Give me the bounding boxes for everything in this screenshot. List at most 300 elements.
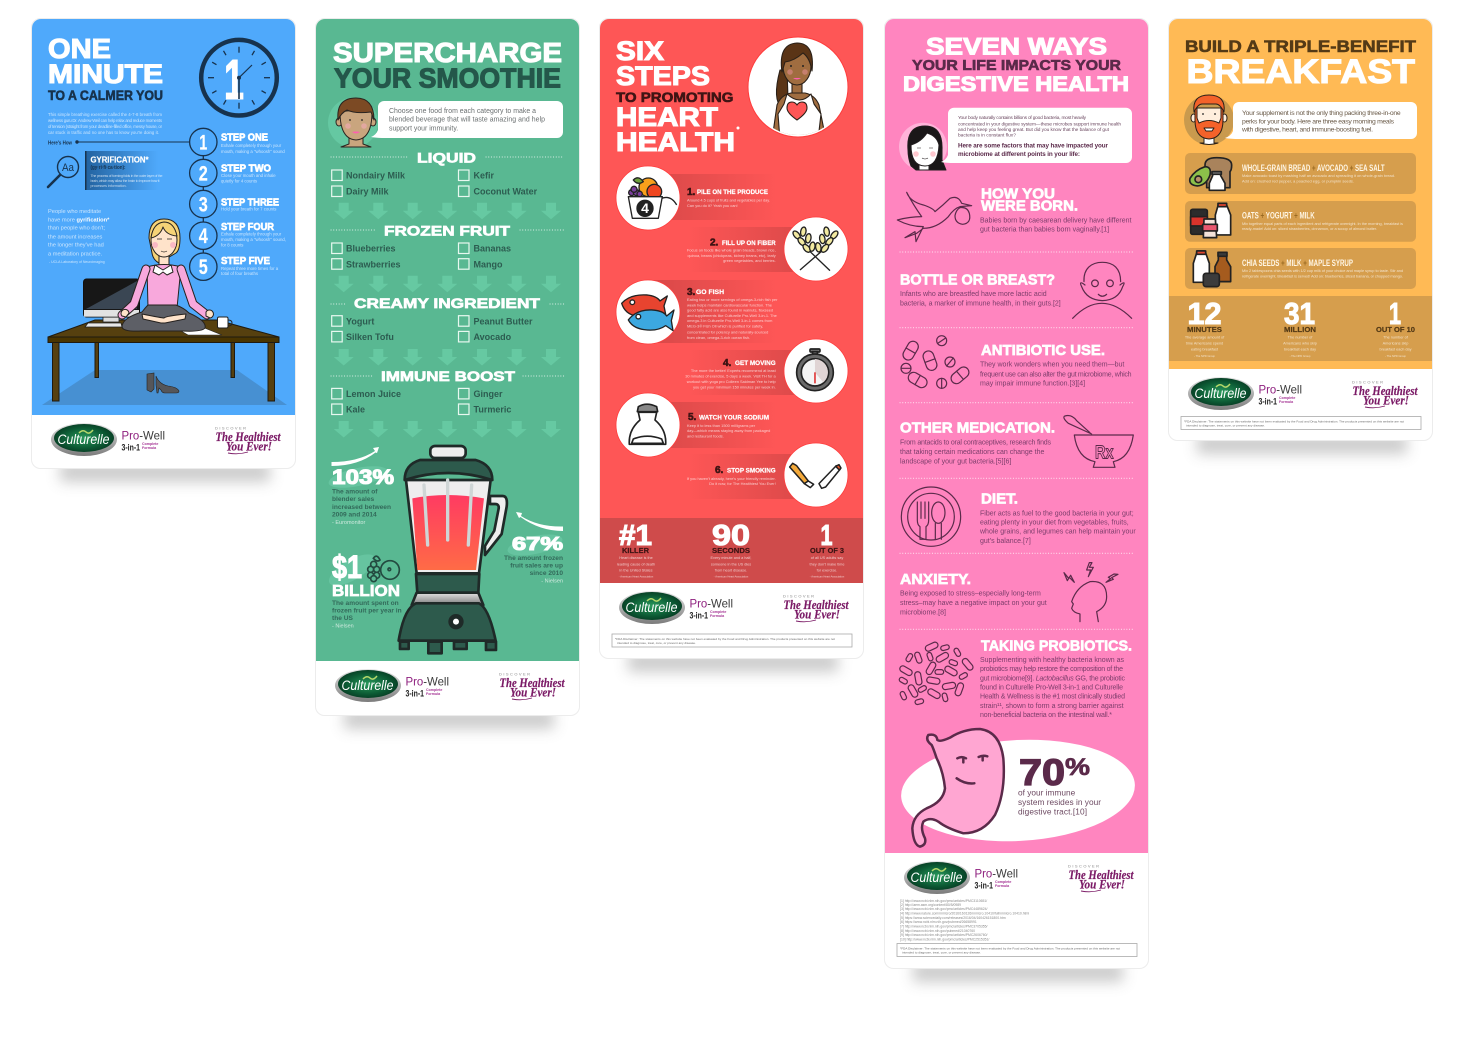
footer: logos: DISCOVER: [1068, 863, 1099, 868]
stat: 31 million: Americans who skip: [1283, 342, 1317, 346]
step 2: fill up on fiber: 2.: [710, 238, 719, 248]
footer: logos: Culturelle: [342, 678, 394, 693]
meditation paragraph: the amount increases: [48, 234, 103, 240]
icon: fruit: [368, 556, 399, 582]
here's how label: Here's How: [48, 140, 73, 146]
gyrification definition box: GYRIFICATION*: [90, 156, 149, 165]
step three: [190, 190, 279, 218]
footer: logos: [335, 669, 565, 702]
stats band: [600, 518, 863, 583]
factor: diet: eating plenty in your diet from vegetables, fruits,: [980, 520, 1129, 527]
title: ONE: [48, 33, 111, 64]
arrows row 3: [334, 349, 561, 366]
stat: 12 minutes: MINUTES: [1187, 325, 1222, 334]
factor: other medication: that taking certain medications can change the: [900, 449, 1044, 456]
step 5: watch your sodium: WATCH YOUR SODIUM: [699, 414, 769, 421]
footer: logos: [904, 861, 1134, 894]
footer: logos: Culturelle: [1194, 386, 1246, 401]
step 2: fill up on fiber: Focus on foods like whole grain breads, brown rice,: [687, 248, 776, 252]
meal: chia seeds, milk, maple syrup: refrigerate overnight. Breakfast is served! Add on: blueberries, sliced banana, or chopped mango.: [1242, 274, 1403, 278]
illustration: blender: [399, 446, 507, 653]
section: frozen fruit: Blueberries: [346, 244, 396, 254]
fda disclaimer: *FDA Disclaimer: The statements on this website have not been evaluated by the Food and Drug Administration. The products presented on this website are not: [900, 946, 1120, 950]
title: DIGESTIVE HEALTH: [903, 73, 1129, 96]
step one: [190, 128, 285, 156]
step 5: watch your sodium: and restaurant foods.: [687, 434, 724, 438]
stat: 103%: increased between: [332, 504, 391, 511]
meal: whole-grain bread, avocado, sea salt: [1185, 153, 1416, 194]
illustration: desk: [48, 320, 279, 401]
stat: 31 million: [1283, 296, 1317, 358]
section: creamy ingredient: Yogurt: [346, 316, 374, 326]
callout: 70% immune system: system resides in your: [1018, 797, 1101, 807]
stat: 31 million: The number of: [1288, 336, 1313, 340]
footer: logos: Formula: [710, 614, 725, 618]
footer: logos: 3-in-1: [690, 610, 708, 620]
arrows row 2: [334, 276, 561, 292]
factor: how you were born: HOW YOU: [981, 186, 1055, 202]
card background: [32, 18, 296, 468]
footer: logos: The Healthiest: [1068, 867, 1134, 882]
step one: STEP ONE: [221, 133, 268, 144]
icon: plate with fork and spoon: [901, 487, 961, 546]
footer: logos: You Ever!: [226, 438, 272, 454]
factor: antibiotic use: may impair immune function.[3][4]: [980, 380, 1085, 387]
step five: total of four breaths: [221, 271, 258, 276]
step 5: watch your sodium: 5.: [688, 412, 697, 423]
references: [5] https://www.sciencedaily.com/releases/2016/04/160426151800.htm: [900, 916, 1006, 920]
stat: #1 killer: leading cause of death: [617, 562, 655, 566]
panel: one minute to a calmer you: [32, 18, 296, 482]
step four: mouth, making a "whoosh" sound,: [221, 237, 286, 242]
gyrification definition box: The process of forming folds in the outer layer of the: [90, 174, 162, 178]
step one: mouth, making a "whoosh" sound: [221, 149, 285, 154]
footer: logos: Culturelle: [910, 870, 962, 885]
footer: logos: Formula: [995, 884, 1010, 888]
meal: whole-grain bread, avocado, sea salt: Make avocado toast by mashing half an avocado and spreading it on whole-grain bread.: [1242, 173, 1395, 178]
stat: 103%: - Euromonitor: [332, 520, 365, 526]
step 6: stop smoking: 6.: [715, 465, 724, 476]
factor: diet: Fiber acts as fuel to the good bacteria in your gut;: [980, 510, 1134, 517]
factor: anxiety: microbiome.[8]: [900, 609, 946, 616]
title: BUILD A TRIPLE-BENEFIT: [1185, 37, 1417, 56]
step three: Hold your breath for 7 counts: [221, 206, 276, 212]
card shadow: [344, 709, 554, 729]
footer: logos: Complete: [1279, 396, 1295, 400]
factor: taking probiotics: non-beneficial bacteria on the intestinal wall.*: [980, 712, 1112, 719]
icon: magnifier: Aa: [62, 162, 75, 174]
footer: logos: DISCOVER: [499, 671, 530, 676]
footer: logos: Pro-Well: [406, 674, 449, 688]
stat: 67%: 67%: [512, 533, 563, 554]
step 4: get moving: workout with yoga pro Colleen Saidman Yee to help: [687, 379, 776, 384]
references: [8] http://www.ncbi.nlm.nih.gov/pubmed/21040760: [900, 929, 975, 933]
stat: 1 out of 3: - American Heart Association: [810, 574, 845, 578]
step four: [190, 222, 286, 249]
illustration: meditating woman: [121, 219, 213, 331]
title: HEALTH: [616, 127, 735, 157]
stat: 90 seconds: someone in the US dies: [711, 562, 751, 566]
title: YOUR SMOOTHIE: [334, 62, 561, 94]
section: frozen fruit: FROZEN FRUIT: [384, 222, 511, 238]
footer: logos: [1188, 377, 1418, 410]
step two: quietly for 4 counts: [221, 179, 257, 184]
avatar: man: [328, 98, 378, 148]
card shadow: [60, 462, 270, 482]
meal: oats, yogurt, milk: OATS + YOGURT + MILK: [1242, 211, 1315, 221]
footer: logos: 3-in-1: [122, 442, 140, 452]
stat: 1 out of 10: [1376, 296, 1415, 358]
step 4: get moving: GET MOVING: [735, 360, 776, 367]
footer: logos: Pro-Well: [974, 866, 1018, 880]
steps: [190, 128, 286, 280]
footer: logos: Complete: [142, 442, 158, 446]
references: [9] http://www.ncbi.nlm.nih.gov/pmc/articles/PMC2606760/: [900, 933, 988, 937]
gyrification definition box: processes information.: [90, 184, 127, 188]
factor: anxiety: stress–may have a negative impact on your gut: [900, 600, 1047, 607]
factor: how you were born: WERE BORN.: [981, 199, 1078, 215]
step five: [190, 253, 279, 280]
green panel: [316, 19, 579, 661]
speech bubble: Here are some factors that may have impacted your: [958, 142, 1109, 150]
illustration: shoes: [147, 373, 179, 393]
card background: [884, 18, 1148, 968]
factor: taking probiotics: TAKING PROBIOTICS.: [981, 638, 1132, 654]
gyrification definition box: (gy·ri·fi·ca·tion):: [90, 165, 126, 171]
step four: STEP FOUR: [221, 222, 275, 233]
step 3: go fish: MEG-3® Fish Oil which is purified for safety,: [687, 324, 763, 328]
fda disclaimer: intended to diagnose, treat, cure, or prevent any disease.: [617, 641, 696, 645]
section: immune boost: [331, 368, 564, 415]
stat: #1 killer: Heart disease is the: [619, 556, 653, 560]
stat: 1 out of 10: OUT OF 10: [1376, 325, 1415, 334]
references: [3] http://www.ncbi.nlm.nih.gov/pmc/articles/PMC4489624/: [900, 907, 988, 911]
speech bubble: support your immunity.: [389, 126, 458, 132]
step five: STEP FIVE: [221, 256, 270, 267]
stat: #1 killer: [617, 520, 655, 578]
arrows row 4: [334, 421, 561, 438]
icon: clock: 1: [224, 48, 244, 112]
section: frozen fruit: [331, 222, 564, 269]
stat: 90 seconds: SECONDS: [712, 546, 750, 555]
step 1: pile on the produce: [616, 166, 777, 230]
step 3: go fish: good fatty acid are also found in walnuts, flaxseed: [687, 308, 773, 312]
references: [10] http://www.ncbi.nlm.nih.gov/pmc/articles/PMC2515351/: [900, 938, 989, 942]
step 3: go fish: omega-3 in Culturelle Pro-Well 3-in-1 comes from: [687, 318, 772, 323]
panel: build a triple-benefit breakfast: [1168, 18, 1432, 454]
card shadow: [628, 652, 838, 672]
step 3: go fish: concentrated for potency and naturally-sourced: [687, 329, 768, 334]
references: [6] https://www.ncbi.nlm.nih.gov/pubmed/26658991: [900, 920, 977, 924]
fda disclaimer: intended to diagnose, treat, cure, or prevent any disease.: [902, 950, 981, 954]
stat: 1 out of 3: for exercise.: [817, 568, 837, 572]
factor: bottle or breast: BOTTLE OR BREAST?: [900, 272, 1055, 288]
step connector: [202, 142, 204, 267]
step 4: get moving: [685, 339, 848, 403]
footer: logos: The Healthiest: [500, 675, 565, 690]
section: creamy ingredient: Silken Tofu: [346, 332, 394, 342]
arrows row 1: [334, 203, 561, 219]
icon: fish: [622, 295, 674, 331]
illustration: papers and mug: [174, 317, 232, 335]
speech bubble: [1225, 102, 1417, 139]
stat: 12 minutes: time Americans spend: [1186, 342, 1223, 346]
title: YOUR LIFE IMPACTS YOUR: [912, 57, 1121, 74]
stat: 31 million: MILLION: [1284, 325, 1316, 334]
footer: logos: Formula: [426, 692, 441, 696]
step five: 5: [199, 256, 208, 279]
factor: taking probiotics: Health & Wellness is the #1 most clinically studied: [980, 694, 1125, 701]
section: frozen fruit: Mango: [474, 259, 503, 269]
intro text: This simple breathing exercise called the 4-7-8 breath from: [48, 112, 162, 117]
references: [2] http://aem.asm.org/content/80/5/0989: [900, 903, 961, 907]
stat: 90 seconds: - American Heart Association: [714, 574, 749, 578]
stat: #1 killer: KILLER: [622, 546, 650, 555]
stat: 67%: - Nielsen: [541, 578, 563, 584]
factor: taking probiotics: probiotics may help restore the composition of the: [980, 666, 1123, 673]
footer: logos: DISCOVER: [783, 593, 814, 598]
pink panel: [885, 19, 1148, 853]
title: STEPS: [616, 61, 710, 91]
section: liquid: Nondairy Milk: [346, 171, 406, 181]
footer: logos: [51, 423, 281, 456]
factor: bottle or breast: bacteria, a marker of immune health, in their guts.[2]: [900, 301, 1061, 308]
stat: #1 killer: #1: [619, 520, 652, 552]
step two: STEP TWO: [221, 164, 271, 175]
footer: logos: The Healthiest: [1352, 383, 1418, 398]
stat: 90 seconds: Every minute and a half,: [711, 556, 751, 560]
step 6: stop smoking: If you haven't already, here's your friendly reminder.: [687, 476, 776, 481]
meditation paragraph: a meditation practice.: [48, 251, 102, 257]
footer: logos: 3-in-1: [1258, 396, 1277, 406]
stat: 103%: 103%: [332, 466, 394, 489]
icon: clock: [201, 40, 277, 116]
icon: salt shaker: [629, 404, 666, 444]
orange panel: [1169, 19, 1432, 369]
icon: baby: [1073, 262, 1132, 318]
stat: 12 minutes: [1185, 296, 1225, 358]
icon: bread, avocado, salt: [1190, 158, 1232, 190]
factor: other medication: [900, 416, 1133, 467]
factor: how you were born: [897, 186, 1132, 242]
avatar: woman with heart: [748, 37, 848, 140]
stat: 90 seconds: [711, 520, 751, 578]
meditation paragraph: than people who don't;: [48, 226, 105, 232]
title: HEART: [616, 102, 719, 132]
factor: bottle or breast: Infants who are breastfed have more lactic acid: [900, 291, 1047, 298]
icon: wheat: [792, 227, 839, 271]
illustration: stomach: [912, 729, 1004, 847]
speech bubble: bacteria is in constant flux?: [958, 132, 1016, 138]
stat: 1 out of 10: The number of: [1383, 336, 1409, 340]
stat: 31 million: 31: [1284, 296, 1315, 331]
stats band: [1169, 296, 1432, 361]
callout: 70% immune system: [899, 729, 1137, 847]
stat: 103%: blender sales: [332, 496, 374, 503]
footer: logos: Pro-Well: [122, 428, 165, 442]
icon: produce bowl: [628, 178, 677, 218]
stat: #1 killer: in the United States: [619, 568, 653, 572]
step 3: go fish: [616, 280, 778, 344]
step four: Exhale completely through your: [221, 232, 282, 236]
stat: 67%: The amount frozen: [504, 555, 563, 562]
stat: 1 out of 10: 1: [1389, 296, 1401, 331]
section: immune boost: Ginger: [474, 389, 503, 399]
factor: taking probiotics: [898, 638, 1132, 719]
step five: Repeat three more times for a: [221, 266, 279, 271]
step 3: go fish: week helps maintain cardiovascular function. The: [687, 302, 772, 307]
footer: logos: You Ever!: [510, 684, 556, 700]
factor: anxiety: Being exposed to stress–especially long-term: [900, 591, 1041, 598]
section: immune boost: Lemon Juice: [346, 389, 401, 399]
fda disclaimer: [897, 944, 1137, 956]
intro text: wellness guru Dr. Andrew Weil can help relax and reduce moments: [48, 118, 162, 123]
step 3: go fish: and supplements like Culturelle Pro-Well 3-in-1. The: [687, 313, 777, 318]
footer: logos: Formula: [142, 446, 157, 450]
icon: oats, yogurt, milk: [1191, 203, 1231, 238]
step three: 3: [199, 194, 208, 216]
step 4: get moving: you get your minimum 150 minutes per week in.: [693, 384, 776, 390]
panel: supercharge your smoothie: [316, 18, 580, 729]
stat: 67%: [504, 512, 564, 584]
title: [903, 33, 1129, 96]
section: immune boost: Turmeric: [474, 405, 511, 415]
callout: 70% immune system: digestive tract.[10]: [1018, 806, 1087, 816]
speech bubble: Choose one food from each category to make a: [389, 108, 536, 115]
panel: seven ways your life impacts your digestive health: [884, 18, 1148, 982]
factor: anxiety: [900, 563, 1118, 622]
factor: diet: gut's balance.[7]: [980, 538, 1031, 545]
stat: 1 out of 3: [810, 520, 845, 578]
section: frozen fruit: Strawberries: [346, 259, 401, 269]
factor: diet: whole grains, and legumes can help maintain your: [979, 529, 1136, 536]
intro text: [48, 112, 163, 135]
factor: other medication: From antacids to oral contraceptives, research finds: [900, 440, 1052, 447]
step 6: stop smoking: [687, 443, 848, 507]
step four: for 8 counts: [221, 242, 243, 248]
footer: logos: The Healthiest: [784, 597, 849, 612]
section: liquid: Dairy Milk: [346, 187, 390, 197]
factor: taking probiotics: strain¹¹, shown to form a strong barrier against: [980, 703, 1124, 710]
meal: whole-grain bread, avocado, sea salt: Add on: crushed red pepper, a poached egg, or pumpkin seeds.: [1242, 178, 1354, 184]
stat: 1 out of 3: OUT OF 3: [810, 546, 844, 555]
stat: $1 billion: frozen fruit per year in: [332, 608, 402, 615]
speech bubble: Your body naturally contains billions of good bacteria, most heavily: [958, 115, 1087, 121]
step 5: watch your sodium: [616, 393, 777, 457]
fda disclaimer: [1181, 416, 1421, 430]
section: creamy ingredient: CREAMY INGREDIENT: [354, 295, 541, 311]
stat: 90 seconds: from heart disease.: [715, 568, 747, 572]
section: liquid: LIQUID: [417, 150, 476, 166]
title: [1185, 37, 1417, 91]
footer: logos: Complete: [426, 688, 442, 692]
callout: 70% immune system: %: [1065, 754, 1090, 781]
icon: stork: [897, 192, 972, 242]
step 3: go fish: 3.: [687, 287, 696, 298]
step 1: pile on the produce: 4: [641, 200, 649, 216]
section: liquid: [331, 150, 564, 197]
step two: 2: [199, 162, 208, 186]
step 4: get moving: 4.: [723, 358, 732, 369]
stat: $1 billion: - Nielsen: [332, 624, 354, 630]
step one: 1: [199, 132, 208, 154]
card background: [600, 18, 864, 658]
stat: 67%: since 2010: [530, 570, 563, 577]
icon: bacteria: [898, 641, 974, 705]
icon: stressed head: [1064, 563, 1118, 622]
meditation paragraph: have more gyrification*: [48, 217, 110, 223]
step 6: stop smoking: Do it now, for The Healthiest You Ever!: [709, 481, 776, 486]
fda disclaimer: intended to diagnose, treat, cure, or prevent any disease.: [1186, 423, 1265, 427]
stat: $1 billion: [324, 548, 402, 630]
intro text: car stuck in traffic and no one has to know you're doing it.: [48, 130, 159, 135]
step 2: fill up on fiber: [687, 217, 848, 281]
stat: $1 billion: $1: [332, 549, 362, 585]
factor: how you were born: Babies born by caesarean delivery have different: [980, 217, 1132, 224]
meditation paragraph: - UCLA Laboratory of Neuroimaging: [49, 260, 105, 264]
meditation paragraph: the longer they've had: [48, 243, 104, 249]
stat: 1 out of 3: 1: [820, 520, 832, 552]
stat: 12 minutes: 12: [1188, 296, 1222, 331]
footer: logos: Culturelle: [626, 600, 678, 615]
footer: logos: Formula: [1279, 400, 1294, 404]
stat: 1 out of 10: - The NPD Group: [1385, 354, 1406, 358]
title: SUPERCHARGE: [333, 37, 562, 68]
factor: how you were born: gut bacteria than babies born vaginally.[1]: [980, 227, 1109, 234]
factor: taking probiotics: gut microbiome[9]. Lactobacillus GG, the probiotic: [980, 675, 1126, 682]
stat: 1 out of 10: Americans skip: [1383, 342, 1408, 346]
footer: logos: [619, 591, 849, 624]
section: frozen fruit: Bananas: [474, 244, 511, 254]
factor: taking probiotics: found in Culturelle Pro-Well 3-in-1 and Culturelle: [980, 685, 1123, 692]
factor: antibiotic use: [901, 336, 1132, 390]
factor: diet: DIET.: [981, 492, 1018, 508]
icon: mortar and pestle: Rx: [1095, 441, 1114, 462]
references: [900, 899, 1029, 942]
step 3: go fish: GO FISH: [696, 289, 724, 296]
title: [616, 36, 740, 157]
stat: $1 billion: the US: [332, 615, 353, 622]
references: [4] http://www.nature.com/nrmicro/2016/160126/nrmicro.10410/full/nrmicro.10410.html: [900, 912, 1029, 916]
callout: 70% immune system: 70: [1019, 752, 1065, 793]
title: TO PROMOTING: [616, 89, 734, 105]
callout: 70% immune system: of your immune: [1018, 788, 1076, 798]
meal: chia seeds, milk, maple syrup: Mix 2 tablespoons chia seeds with 1/2 cup milk of your choice and maple syrup to taste. Stir and: [1242, 268, 1403, 273]
fda disclaimer: [612, 634, 852, 647]
step 3: go fish: Eating two or more servings of omega-3-rich fish per: [687, 297, 778, 302]
gyrification definition box: [85, 151, 162, 190]
step 6: stop smoking: STOP SMOKING: [727, 467, 776, 474]
footer: logos: Pro-Well: [690, 596, 733, 610]
avatar: woman with black hair: [899, 123, 947, 171]
footer: logos: You Ever!: [1079, 876, 1125, 892]
illustration: computer monitor: [84, 279, 140, 327]
title: BREAKFAST: [1186, 53, 1415, 91]
footer: logos: Complete: [995, 880, 1011, 884]
stat: #1 killer: - American Heart Association: [619, 574, 654, 578]
icon: pills: [901, 336, 971, 390]
meal: whole-grain bread, avocado, sea salt: WHOLE-GRAIN BREAD + AVOCADO + SEA SALT: [1242, 163, 1385, 173]
stat: 31 million: - The NPD Group: [1290, 354, 1311, 358]
title: TO A CALMER YOU: [48, 87, 163, 103]
meal: chia seeds, milk, maple syrup: CHIA SEEDS + MILK + MAPLE SYRUP: [1242, 258, 1353, 268]
card shadow: [913, 962, 1123, 982]
red panel: [600, 19, 863, 583]
speech bubble: concentrated in your digestive system—these microbes support immune health: [958, 121, 1121, 127]
intro text: of tension (straight from your deadline-filled office, messy house, or: [48, 124, 163, 129]
step two: [190, 159, 276, 187]
icon: magnifier: [48, 156, 78, 187]
